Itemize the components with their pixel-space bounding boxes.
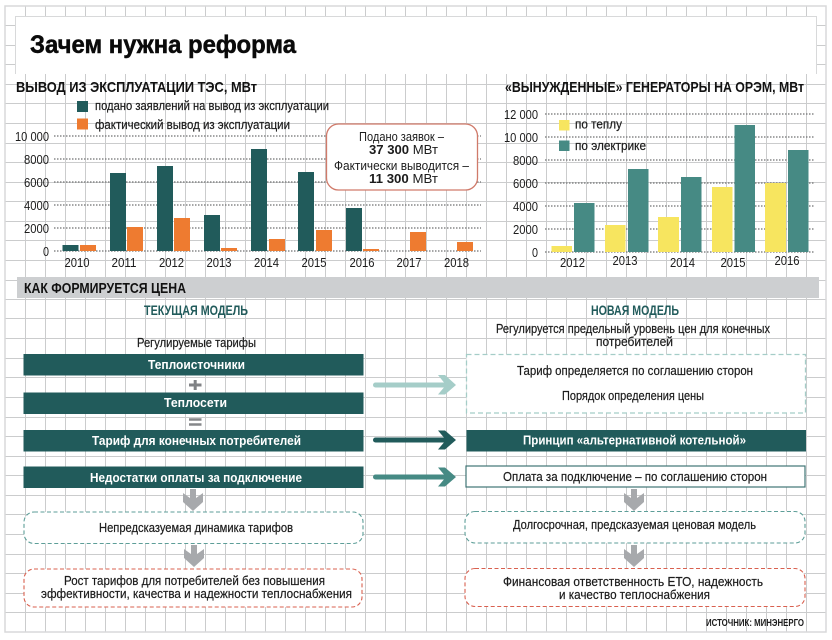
bar: connection payment shortfalls: Недостатки оплаты за подключение bbox=[90, 470, 302, 485]
x axis: forced generators bbox=[560, 253, 800, 270]
bar: end consumer tariff: Тариф для конечных потребителей bbox=[92, 433, 301, 448]
x axis: retirement chart: 2017 bbox=[396, 255, 422, 270]
y axis: retirement chart bbox=[15, 129, 481, 259]
bar: heat networks bbox=[24, 392, 364, 414]
bar: end consumer tariff bbox=[24, 430, 364, 452]
box: unpredictable tariffs: Непредсказуемая динамика тарифов bbox=[99, 521, 293, 535]
bar: alternative boiler principle: Принцип «альтернативной котельной» bbox=[523, 432, 746, 448]
y axis: forced generators bbox=[504, 107, 815, 260]
x axis: forced generators: 2013 bbox=[612, 253, 638, 268]
y axis: retirement chart: 6000 bbox=[24, 175, 49, 190]
heading: retirement chart: ВЫВОД ИЗ ЭКСПЛУАТАЦИИ ТЭС, МВт bbox=[16, 79, 257, 96]
legend: forced generators bbox=[559, 118, 646, 153]
arrow: down 3 bbox=[624, 489, 644, 511]
callout: totals bbox=[326, 124, 478, 190]
text: regulated tariffs: Регулируемые тарифы bbox=[137, 336, 256, 350]
x axis: retirement chart: 2010 bbox=[64, 255, 90, 270]
y axis: forced generators: 4000 bbox=[513, 199, 538, 214]
text: regulated price ceiling: потребителей bbox=[596, 335, 673, 349]
y axis: retirement chart: 4000 bbox=[24, 198, 49, 213]
callout: totals: Подано заявок – bbox=[359, 130, 444, 144]
legend: forced generators: по электрике bbox=[575, 139, 646, 153]
icon: plus bbox=[189, 380, 202, 390]
arrow: teal to connection agreement bbox=[373, 468, 456, 486]
y axis: forced generators: 2000 bbox=[513, 222, 538, 237]
section heading: price formation bbox=[17, 277, 819, 298]
y axis: retirement chart: 2000 bbox=[24, 221, 49, 236]
box: financial responsibility: и качество теплоснабжения bbox=[559, 588, 710, 602]
panel: forced generators chart bbox=[504, 79, 815, 270]
bars: retirement chart bbox=[62, 149, 473, 251]
y axis: forced generators: 12 000 bbox=[504, 107, 538, 122]
callout: totals: 37 300 МВт bbox=[369, 143, 438, 157]
y axis: forced generators: 10 000 bbox=[504, 130, 538, 145]
x axis: retirement chart: 2018 bbox=[444, 255, 469, 270]
bar: heat networks: Теплосети bbox=[164, 395, 227, 410]
box: connection agreement bbox=[466, 466, 805, 487]
box: contract tariff: Тариф определяется по соглашению сторон bbox=[517, 364, 753, 378]
section heading: price formation: КАК ФОРМИРУЕТСЯ ЦЕНА bbox=[24, 281, 186, 297]
box: financial responsibility bbox=[465, 568, 805, 606]
box: tariff growth: эффективности, качества и надежности теплоснабжения bbox=[41, 587, 352, 601]
heading: current model: ТЕКУЩАЯ МОДЕЛЬ bbox=[144, 303, 248, 318]
legend: retirement chart: подано заявлений на вывод из эксплуатации bbox=[95, 99, 329, 113]
text: regulated price ceiling bbox=[496, 322, 771, 349]
x axis: retirement chart: 2016 bbox=[350, 255, 374, 270]
panel: current model bbox=[24, 303, 364, 607]
y axis: forced generators: 6000 bbox=[513, 176, 538, 191]
x axis: retirement chart bbox=[64, 255, 469, 270]
heading: new model: НОВАЯ МОДЕЛЬ bbox=[591, 303, 679, 318]
box: tariff growth bbox=[24, 569, 362, 607]
box: long-term model: Долгосрочная, предсказуемая ценовая модель bbox=[513, 518, 756, 532]
x axis: retirement chart: 2014 bbox=[254, 255, 279, 270]
legend: retirement chart bbox=[77, 99, 329, 132]
bars: forced generators bbox=[552, 125, 808, 252]
x axis: retirement chart: 2012 bbox=[159, 255, 184, 270]
text: regulated price ceiling: Регулируется предельный уровень цен для конечных bbox=[496, 322, 771, 336]
source note: ИСТОЧНИК: МИНЭНЕРГО bbox=[706, 618, 804, 629]
arrow: dark to alternative boiler bbox=[373, 430, 456, 450]
y axis: forced generators: 8000 bbox=[513, 153, 538, 168]
y axis: forced generators: 0 bbox=[532, 245, 538, 260]
x axis: retirement chart: 2015 bbox=[302, 255, 326, 270]
icon: equals bbox=[189, 420, 202, 424]
bar: heat sources bbox=[24, 354, 364, 376]
arrow: down 2 bbox=[184, 545, 204, 567]
bar: alternative boiler principle bbox=[466, 430, 806, 452]
box: connection agreement: Оплата за подключение – по соглашению сторон bbox=[503, 470, 767, 484]
y axis: retirement chart: 8000 bbox=[24, 152, 49, 167]
box: contract tariff: Порядок определения цены bbox=[562, 389, 704, 403]
box: contract tariff bbox=[466, 354, 806, 413]
arrow: down 4 bbox=[624, 545, 644, 567]
x axis: retirement chart: 2013 bbox=[206, 255, 232, 270]
x axis: retirement chart: 2011 bbox=[112, 255, 136, 270]
legend: forced generators: по теплу bbox=[575, 118, 623, 132]
title bbox=[16, 16, 816, 74]
bar: connection payment shortfalls bbox=[24, 466, 364, 488]
box: financial responsibility: Финансовая ответственность ЕТО, надежность bbox=[503, 575, 763, 589]
box: unpredictable tariffs bbox=[24, 512, 363, 544]
y axis: retirement chart: 0 bbox=[43, 244, 49, 259]
panel: new model bbox=[465, 303, 806, 606]
x axis: forced generators: 2016 bbox=[774, 253, 800, 268]
arrow: down 1 bbox=[183, 489, 203, 511]
x axis: forced generators: 2012 bbox=[560, 255, 585, 270]
panel: power plant retirement chart bbox=[15, 79, 481, 270]
bar: heat sources: Теплоисточники bbox=[148, 357, 245, 372]
arrow: pale to contract tariff bbox=[373, 375, 456, 394]
x axis: forced generators: 2014 bbox=[670, 255, 695, 270]
box: tariff growth: Рост тарифов для потребителей без повышения bbox=[64, 574, 325, 588]
y axis: retirement chart: 10 000 bbox=[15, 129, 49, 144]
callout: totals: Фактически выводится – bbox=[334, 159, 469, 173]
legend: retirement chart: фактический вывод из эксплуатации bbox=[95, 118, 290, 132]
box: long-term model bbox=[465, 512, 805, 543]
x axis: forced generators: 2015 bbox=[720, 255, 746, 270]
title: Зачем нужна реформа bbox=[30, 31, 297, 59]
callout: totals: 11 300 МВт bbox=[369, 172, 438, 186]
